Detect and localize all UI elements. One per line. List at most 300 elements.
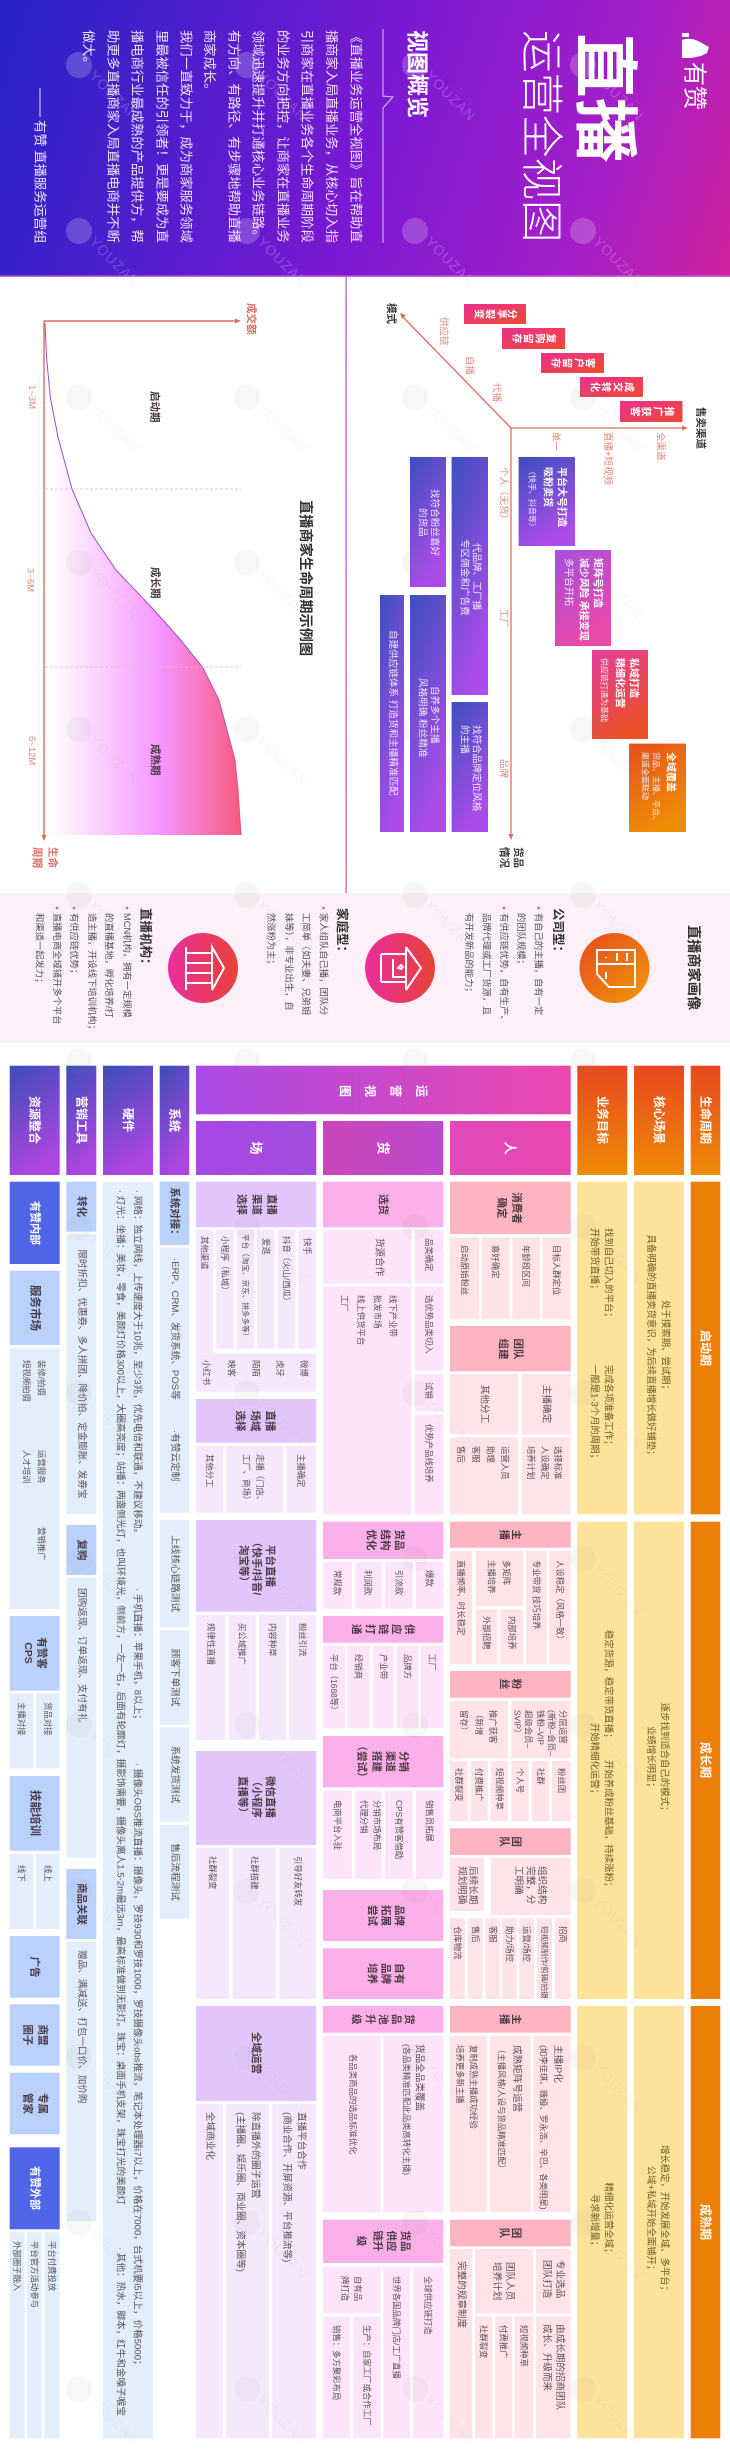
head: 商盟圈子: 商盟 [36,2024,49,2046]
head: 微信直播: （小程序 [251,1776,264,1818]
head: 分销渠道搭建: 渠道 [384,1751,397,1772]
cell: 工厂 [421,1646,443,1728]
cell: 短视频制作: 短视频制作/剪辑/拍摄 [540,1926,550,1999]
box: 找符合粉丝喜好: 找符合粉丝喜好 [428,489,440,557]
cell: 产业带 [373,1646,393,1728]
header: 系统 [160,1066,189,1175]
stage labels [148,391,162,776]
panel: banner 运营视图: 营 [389,1085,404,1097]
head: 商品关联 [66,1869,96,1939]
cell: 系统发货测试 [160,1727,189,1822]
head: 品牌拓展尝试 [323,1890,443,1941]
cell: 推广获客: （新增 [474,1710,484,1735]
cell: 粉丝引流: 粉丝引流 [298,1623,308,1657]
cell: 后续长期规划明确: 后续长期 [467,1866,479,1904]
box: 平台大号打造: 平台大号打造 [556,467,568,527]
cell: 社群 [532,1761,549,1821]
head: 直播渠道选择: 直播 [266,1194,279,1216]
cell: 主播对接: 主播对接 [16,1702,26,1736]
head: 团队 成熟期: 团 [510,2228,522,2238]
axis label: 货品情况 [498,847,525,868]
cell: 其他渠道: 陌陌 [251,1360,261,1377]
panel: column 硬件 [103,1066,153,2438]
cell: 服务内容: 运营服务 [37,1450,47,1484]
text block: 家庭型: 家庭型： [335,908,350,958]
cell: 运营人员 [450,1437,518,1514]
cell: 团队人员培养计划: 团队人员 [504,2262,516,2300]
head: 微信直播: 微信直播 [264,1776,277,1818]
box: 复购留存 [502,328,565,349]
box: 复购留存: 存 [510,334,524,344]
cell: 复制成熟主播: 复制成熟主播成功经验 [468,2045,478,2129]
cell: 顾客下单测试: 顾客下单测试 [169,1649,181,1707]
cell: 买公域推广: 买公域推广 [237,1623,247,1665]
cell: 世界各国品牌门店: 世界各国品牌门店/工厂直播 [392,2276,402,2379]
head: 货品池升级: 货 [403,2014,416,2025]
text block: overview: 助更多直播商家入局直播电商并不断 [106,30,122,243]
text block: 直播机构: 直播电商全域铺开多个平台 [52,913,63,1025]
head: 供应链打通: 通 [350,1624,362,1635]
heading: 视图概览: 视图概览 [404,30,430,118]
cell: 顾客下单测试 [160,1630,189,1725]
cell: 服务内容: 营销推广 [37,1527,47,1560]
cell: 关联工具: 赠品、满减送、打包一口价、加价购 [76,1950,88,2104]
text block: 家庭型 [266,907,350,1015]
cell: 硬件说明: · 手机直播：苹果手机，8以上； [132,1588,144,1724]
cell: 人设稳定: 人设稳定（风格一致） [555,1560,565,1644]
head: 商盟圈子: 圈子 [21,2024,33,2046]
cell: 多矩阵主播培养: 主播培养 [487,1560,497,1594]
cell: 社群: 社群 [535,1768,545,1785]
text block: overview [81,30,364,243]
header: 系统: 系统 [168,1108,182,1132]
head: 自有品牌培养 [323,1948,443,1999]
cell: 选择标准: 选择标准 [553,1446,563,1480]
cell: 短视频制作 [537,1918,552,1999]
cell: 主播IP化: 主播IP化 [552,2045,564,2083]
cell: 抖音: 抖音（火山/西瓜） [282,1236,292,1305]
cell: 喜好确定: 喜好确定 [491,1245,501,1279]
cell: 内部培养: 内部培养 [507,1616,517,1650]
stage: 启动期: 启动期 [698,1330,714,1366]
cell: 启动期核心场景 [634,1182,684,1514]
cell: 货源渠道 [323,1287,411,1514]
box: 矩阵号打造: 矩阵号打造 [592,558,604,608]
cell: 线下 [10,1854,33,1929]
cell: 多矩阵主播培养: 多矩阵 [502,1560,512,1586]
cell: 线上 [36,1854,60,1929]
head: 团队组建: 团队 [512,1338,525,1360]
box: 矩阵号打造: 减少风险 承接变现 [578,558,590,641]
panel: banner 运营视图: 运 [415,1085,429,1097]
cell: 直播频率: 直播频率、时长稳定 [456,1560,466,1636]
head: 全域运营: 全域运营 [250,2032,263,2074]
cell: 系统发货测试: 系统发货测试 [169,1746,181,1804]
box: 找符合品牌定位: 找符合品牌定位风格 [470,725,482,812]
head: 自有品牌培养: 品牌 [380,1963,393,1985]
box: 复购留存: 购 [534,334,546,344]
cell: 货品全品类覆盖 [383,2036,443,2212]
cell: 抖音 [278,1230,295,1349]
head: 货品结构优化: 货品 [393,1530,406,1550]
cell: 成长期业务目标 [577,1522,627,1999]
cell: 平台官方活动参与 [27,2232,42,2438]
cell: 销售员拓展: 销售员拓展 [425,1800,435,1842]
cell: 分层运营: SVIP） [512,1710,522,1737]
cell: 自有品牌打造: 牌打造 [340,2276,350,2302]
text block: overview: 的业务方向把控，让商家在直播业务 [276,30,292,243]
axis tick labels: 工厂 [498,609,508,628]
cell: 硬件说明: · 网络：独立网线，上传速度大于10兆，至少3兆，优先电信和联通，不建议移动。 [132,1190,144,1538]
panel: top banner [0,0,730,277]
header: 人 [450,1121,571,1175]
cell: 主播确定 [286,1446,316,1513]
head: 平台直播: （快手/抖音/ [251,1537,264,1595]
box: 推广获客: 广 [652,406,664,416]
axis label: 售卖渠道: 售卖渠道 [694,407,708,449]
cell: 推广获客: 推广获客 [488,1710,498,1744]
cell: 专业选品团队打造: 专业选品 [554,2260,566,2298]
cell: 完整的规章制度: 完整的规章制度 [456,2261,468,2329]
duration labels: 3~6M [24,568,36,592]
header: 人: 人 [502,1141,518,1155]
box: 代品牌 工厂播 [452,457,488,695]
head: 有赞外部: 有赞外部 [29,2166,43,2210]
cell: 社群裂变 [450,1761,468,1821]
axis tick labels: 品牌 [498,759,510,778]
box: 全域覆盖: 货品、主播、平台、 [652,752,662,824]
head: 自有品牌培养: 培养 [366,1963,379,1985]
cell: 直播平台合作 [272,2104,316,2438]
head: 供应链打通: 链 [377,1624,390,1635]
cell: 社群裂变 成熟期: 社群裂变 [479,2325,489,2358]
box: 自养多个主播 [410,595,446,832]
header: 业务目标 [577,1066,627,1175]
box: 找符合粉丝喜好 [410,457,446,587]
cell: 平台付费投放 [44,2232,60,2438]
head: 品牌拓展尝试: 尝试 [366,1905,379,1926]
head: 有赞内部 [10,1182,60,1264]
head: 直播场域选择: 选择 [234,1410,247,1432]
head: 微信直播 [196,1751,316,1845]
cell: 社群裂变: 社群裂变 [208,1856,218,1890]
head: 团队 成熟期: 队 [498,2228,511,2239]
cell: 货品全品类覆盖: 货品全品类覆盖 [414,2044,426,2112]
box: 复购留存: 留 [522,334,534,344]
box: 矩阵号打造: 多平台开拓 [562,558,574,606]
head: 直播渠道选择 [196,1182,316,1227]
header: 营销工具 [66,1066,96,1175]
cell: 货品全品类覆盖: (各品类精准匹配此品类高转化主播) [402,2044,412,2175]
title: 直播: 直播 [568,33,642,163]
head: 直播场域选择 [196,1399,316,1443]
cell: 爱逛 [257,1230,275,1349]
cell: 选优势品类切入: 选优势品类切入 [424,1295,434,1354]
head: 供应链打通: 打 [364,1624,377,1635]
cell: 自有品牌打造: 自有品 [353,2276,363,2301]
cell: 成熟期业务目标: 精细化运营全域； [604,2182,614,2258]
header: 资源整合: 资源整合 [28,1096,43,1144]
cell: 买公域推广 [229,1615,256,1740]
cell: 试销: 试销 [424,1382,434,1399]
cell: 线上: 线上 [43,1865,53,1882]
axis tick labels: 全渠道 [654,432,666,461]
panel: column 核心场景 [634,1066,684,2438]
axis tick labels: 供应链 [438,317,450,346]
box: 私域打造: 私域打造 [628,658,640,698]
cell: 短视频种草 成熟期 [515,2316,533,2438]
cell: 生产 [353,2317,381,2438]
cell: 售后流程测试: 售后流程测试 [169,1843,181,1901]
header: 业务目标: 业务目标 [595,1096,610,1144]
box: 客户留存: 客 [584,358,596,368]
box: 分享裂变 [464,304,526,324]
cell: 由成长期的招商团队 [536,2316,571,2438]
head: 有赞外部 [10,2147,60,2229]
text block: 家庭型: 然涨粉为主； [266,913,277,969]
cell: 品类确定: 品类确定 [424,1238,434,1272]
cell: 引导好友转发 [279,1848,316,1999]
axes [42,318,241,841]
cell: 粉丝团 [552,1761,571,1821]
header: 资源整合 [10,1066,60,1175]
cell: 复购工具: 团购返现、订单返现、支付有礼 [76,1588,88,1723]
head: 团队组建: 组建 [497,1338,510,1360]
cell: 引流款 [385,1562,413,1609]
head: 粉丝 [450,1671,571,1698]
cell: 品牌方 [397,1646,418,1728]
cell: 社群裂变 成熟期 [475,2316,492,2438]
cell: 货源合作: 货源合作 [374,1238,386,1277]
head: 团队 [450,1828,571,1855]
box: 推广获客: 推 [662,406,676,416]
panel: column 系统 [160,1066,189,1919]
panel: column 货 [323,1121,443,2438]
box: 客户留存 [541,353,604,373]
head: 货品供应链升级: 链升 [371,2230,384,2252]
cell: 付费推广 成熟期 [495,2316,512,2438]
cell: 常规款 [323,1562,352,1609]
head: 消费者确定: 确定 [496,1198,509,1219]
axis label: 货品情况: 货品 [512,847,525,868]
box: 私域打造: 供应链打通为基础 [600,658,610,722]
panel: column 资源整合 [10,1066,60,2438]
head: 服务市场 [10,1271,60,1345]
cell: 团队人员培养计划: 培养计划 [491,2262,503,2300]
cell: 分销市场布局 [355,1791,382,1879]
cell: 组织结构 [491,1858,571,1915]
box: 矩阵号打造 [555,550,611,646]
cell: 推广获客: 留存） [459,1710,469,1735]
header: 货 [323,1121,443,1175]
cell: 全球供应链打造: 全球供应链打造 [423,2276,433,2335]
box: 私域打造: 精细化运营 [614,658,626,708]
cell: 平台1688 [323,1646,345,1728]
head: 货品池升级: 级 [350,2014,363,2025]
cell: 招商 [555,1918,571,1999]
head: 直播场域选择: 直播 [264,1410,277,1432]
head: 广告 [10,1936,60,1998]
cell: 选品标准优化 [323,2036,381,2212]
head: 分销渠道搭建: 搭建 [371,1751,384,1772]
cell: 完整的规章制度 [450,2249,472,2438]
head: 平台直播 [196,1520,316,1612]
cell: 圈子运营 [226,2104,269,2438]
cell: 其他渠道 [196,1230,316,1392]
text block: 直播机构: 有供应链优势； [69,913,80,978]
cell: ERP 有赞云定制: ·ERP、CRM、发货系统、POS等 [169,1258,181,1400]
box: 平台大号打造 [519,457,575,546]
cell: 其他渠道: 映客 [227,1360,237,1377]
cell: 硬件说明: · 摄像头OBS推流直播：摄像头，罗技930和罗技1000，罗技摄像头obs推流，笔记本处理器i7以上，价格在7000，台式机要i5以上，价格5000； [132,1763,144,2370]
cell: 目标人群定位: 目标人群定位 [552,1245,562,1295]
cell: 启动期业务目标: 完成各项准备工作； [604,1365,614,1449]
cell: 销售员拓展 [416,1791,443,1879]
cell: 货源合作 [323,1230,411,1284]
cell: 引流款: 引流款 [394,1570,404,1596]
cell: 运营人员: 售后 [456,1446,466,1463]
cell: 快手 [298,1230,316,1349]
text block: overview: 领域迅速提升并打通核心业务链路。 [250,30,266,243]
cell: 圈子运营: 除直播外的圈子运营 [250,2112,262,2199]
head: 选货 [323,1182,443,1227]
cell: 平台 [237,1230,254,1349]
axis tick labels: 直播+短视频 [602,432,614,486]
head: 供应链打通 [323,1616,443,1643]
cell: 启动期核心场景: 处于摸索期、尝试期； [660,1300,672,1394]
cell: 直播平台合作: (商业合作、开屏资源、平台推流等) [281,2112,293,2262]
axis label: 生命周期: 生命 [47,847,60,868]
text block: 公司型: 的团队规模； [516,913,527,969]
cell: 硬件说明: · 其他：热水，脚本，红牛和金嗓子喉宝 [114,2247,126,2416]
cell: 后续长期规划明确 [450,1858,484,1911]
header: 货: 货 [376,1141,390,1155]
cell: 转化工具: 限时折扣、优惠券、多人拼团、降价拍、定金膨胀、发券宝 [76,1249,88,1499]
head: 转化 [66,1182,96,1232]
head: 服务市场: 服务市场 [29,1285,43,1331]
cell: 运营人员: 运营人员 [500,1446,510,1480]
box: 成交转化: 成 [622,382,636,392]
head: 货品结构优化 [323,1522,443,1559]
subtitle: 运营全视图: 运营全视图 [516,30,564,243]
cell: 粉丝团: 粉丝团 [556,1768,566,1793]
cell: 品牌方: 品牌方 [402,1654,412,1679]
icon: family home [365,933,435,1003]
axis label: 生命周期 [31,847,60,868]
box: 自建供应链体系 [380,595,404,832]
text block: overview: 商家成长。 [202,30,218,96]
head: 技能培训: 技能培训 [29,1790,43,1836]
area curve [45,323,241,835]
cell: 经销商: 经销商 [354,1654,364,1679]
head: 商品关联: 商品关联 [75,1883,88,1925]
cell: 启动原始粉丝 [450,1237,479,1319]
box: 找符合品牌定位: 的主播 [458,725,470,754]
cell: 爆款: 爆款 [425,1570,435,1587]
text block: 公司型: 公司型： [551,908,565,958]
cell: 客服 [486,1918,500,1999]
head: 分销渠道搭建: 分销 [397,1751,410,1772]
head: 专属管家 [10,2073,60,2134]
stage labels: 启动期 [148,391,162,422]
cell: 引导好友转发: 引导好友转发 [293,1856,303,1907]
cell: 组织结构: 工明确 [512,1866,524,1895]
cell: 运营人员: 助理 [486,1446,496,1463]
cell: 成长期业务目标: 稳定货源，稳定带货直播； [604,1630,614,1743]
cell: 直播平台合作: 直播平台合作 [296,2112,308,2170]
cell: 小程序: 小程序（私域） [220,1236,230,1295]
cell: 分层运营: 分层运营 [558,1710,568,1744]
cell: 推广获客 [450,1701,508,1758]
box: 全域覆盖 [629,744,686,832]
head: 分销渠道搭建: （尝试） [356,1740,369,1782]
cell: 全球供应链打造 [413,2267,443,2438]
cell: 客服: 客服 [488,1926,498,1943]
panel: column 场 [196,1121,316,2438]
head: 专属管家: 专属 [36,2093,49,2114]
cell: 上线核心链路测试: 上线核心链路测试 [169,1535,181,1612]
cell: 内容种草 [259,1615,286,1740]
head: 团队: 团 [510,1836,522,1847]
cell: 社群裂变 [196,1848,229,1999]
cell: 货品对接: 货品对接 [43,1702,53,1736]
cell: 选优势品类切入 [415,1287,443,1371]
cell: 招商: 招商 [558,1926,568,1943]
cell: 电商平台入驻: 电商平台入驻 [332,1800,342,1851]
head: 货品结构优化: 优化 [365,1530,378,1551]
text block: 家庭型: 妹等），非专业出生，自 [284,913,295,1011]
cell: 助力/场控: 助力/场控 [504,1926,514,1962]
cell: 试销 [415,1374,443,1412]
head: 复购: 复购 [75,1540,88,1560]
cell: 分层运营: 超级会员– [524,1710,534,1748]
box: 私域打造 [592,650,648,739]
head: 消费者确定 [450,1182,571,1234]
box: 分享裂变: 分 [506,309,518,319]
cell: 付费推广 成熟期: 付费推广 [499,2325,509,2358]
box: 分享裂变: 裂 [484,309,496,319]
cell: 主播IP化: (如李佳琪、薇娅、罗永浩、辛巴、各类明星) [538,2045,548,2210]
cell: 启动期核心场景: 具备明确的直播卖货意识，为后续直播增长做好铺垫； [646,1234,657,1460]
logo: 有赞 [680,33,709,110]
box: 分享裂变: 享 [496,309,508,319]
cell: 货源渠道: 线上供货平台 [356,1295,366,1345]
head: 主播: 主 [510,1529,523,1540]
box: 代品牌 工厂播: 代品牌、工厂播 [470,543,482,611]
cell: 平台付费投放: 平台付费投放 [47,2241,57,2292]
cell: 助力/场控 [502,1918,517,1999]
text block: 公司型: 有开发新品的能力； [464,913,475,997]
cell: 团队人员培养计划 [475,2249,533,2313]
cell: CPS有赞客借助: CPS有赞客借助 [394,1800,404,1859]
cell: 外部招聘 [476,1609,497,1664]
cell: 主播IP化 [533,2036,571,2212]
stage: 启动期 [691,1182,720,1514]
signature: 有赞 直播服务运营组 [32,120,48,243]
cell: 内容种草: 内容种草 [268,1623,278,1656]
text block: 公司型 [464,907,565,1025]
cell: 启动期业务目标 [577,1182,627,1514]
cell: 直播频率 [450,1551,472,1664]
head: 商盟圈子 [10,2004,60,2066]
text block: overview: 里最被信任的引领者！更是要成为直 [154,30,170,243]
head: 货品结构优化: 结构 [379,1530,392,1550]
head: 有赞客CPS: 有赞客 [36,1637,49,1669]
cell: 其他渠道: 其他渠道 [200,1236,210,1270]
header: 场 [196,1121,316,1175]
head: 主播 成熟期: 主 [510,2014,523,2025]
head: 供应链打通: 应 [390,1624,403,1635]
